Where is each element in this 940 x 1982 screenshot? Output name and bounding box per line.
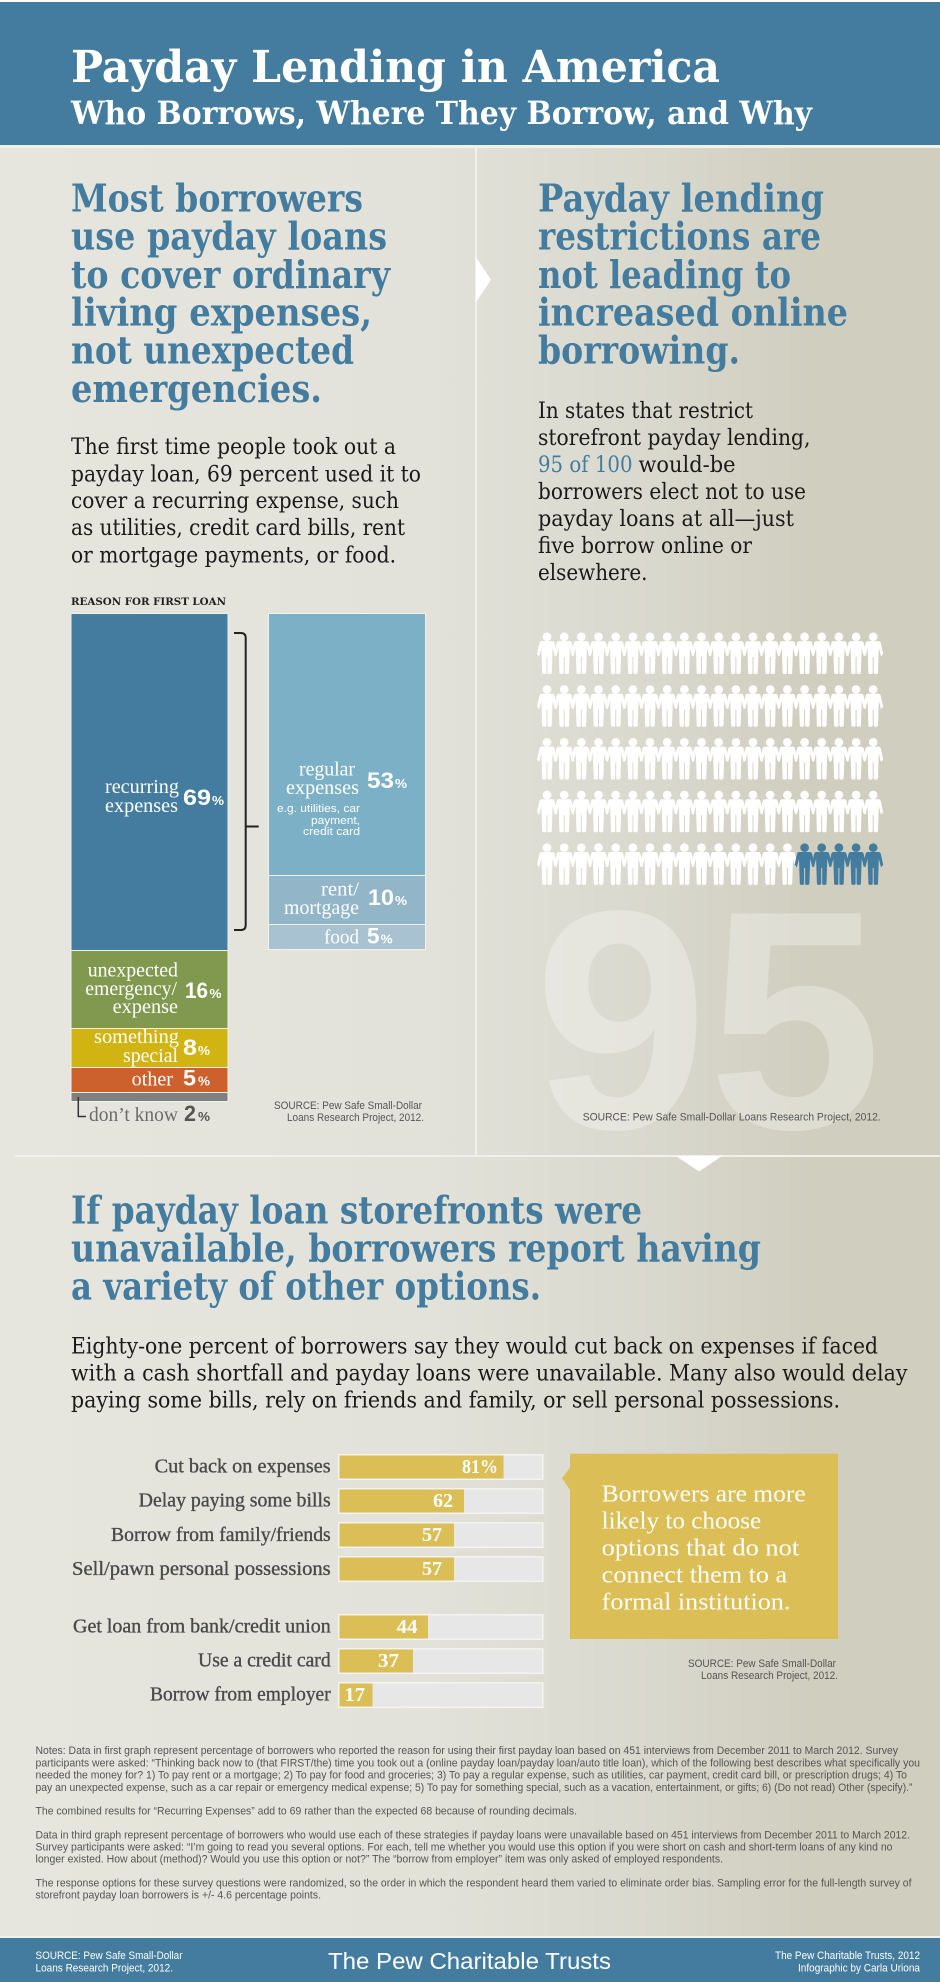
heading: payday lending restrictions: increased online	[538, 290, 848, 334]
segment: rent/mortgage 10%: %	[395, 893, 407, 908]
body text: eighty-one percent	[71, 1334, 908, 1414]
subtitle: Who Borrows, Where They Borrow, and Why	[70, 94, 813, 132]
notes: Notes: Data in first graph represent percentage of borrowers who reported the reason for using their first payday loan based on 451 interviews from December 2011 to March 2012. Survey	[36, 1745, 899, 1757]
body text: states that restrict: would-be	[638, 453, 736, 478]
callout: formal institution: likely to choose	[602, 1508, 761, 1534]
bar: delay paying some bills 62: 62	[433, 1490, 453, 1512]
footer credit: The Pew Charitable Trusts, 2012	[775, 1950, 920, 1962]
bar: cut back on expenses 81%	[155, 1455, 543, 1479]
body text: first time: The first time people took out a	[71, 435, 396, 460]
bar: get loan from bank/credit union 44: 44	[396, 1616, 418, 1638]
segment: regular expenses 53%: %	[395, 776, 407, 791]
notes: The response options for these survey questions were randomized, so the order in which the respondent heard them varied to eliminate order bias. Sampling error for the full-length survey of	[36, 1878, 912, 1890]
bar: sell/pawn personal possessions 57: Sell/pawn personal possessions	[72, 1559, 331, 1580]
notes: storefront payday loan borrowers is +/- 4.6 percentage points.	[36, 1890, 321, 1902]
segment: unexpected emergency 16%	[71, 950, 228, 1028]
bar: borrow from employer 17	[150, 1683, 543, 1707]
bar: get loan from bank/credit union 44: Get loan from bank/credit union	[73, 1617, 331, 1638]
title: Payday Lending in America	[71, 42, 720, 93]
body text: states that restrict: payday loans at all—just	[538, 507, 794, 532]
body text: first time: or mortgage payments, or food.	[71, 544, 396, 568]
callout: formal institution: formal institution.	[602, 1590, 790, 1616]
segment: rent/mortgage 10%: mortgage	[284, 897, 359, 919]
heading: storefronts unavailable: If payday loan storefronts were	[71, 1187, 642, 1232]
segment: unexpected emergency 16%: %	[210, 986, 222, 1001]
heading: payday lending restrictions: Payday lending	[538, 176, 824, 220]
heading: most borrowers: to cover ordinary	[71, 252, 391, 297]
footer	[0, 1936, 940, 1982]
heading: payday lending restrictions: borrowing.	[538, 328, 740, 372]
bar: get loan from bank/credit union 44	[73, 1615, 543, 1639]
segment: regular expenses 53%: expenses	[286, 777, 359, 799]
bar: borrow from employer 17: 17	[344, 1684, 365, 1706]
source note: Loans Research Project, 2012.	[701, 1670, 838, 1682]
footer source	[36, 1950, 183, 1974]
segment: other 5%: 5	[183, 1066, 196, 1091]
body text: states that restrict: elsewhere.	[538, 561, 648, 586]
source note: SOURCE: Pew Safe Small-Dollar	[274, 1100, 422, 1112]
segment: recurring expenses 69%: recurring	[105, 776, 179, 798]
segment: other 5%: %	[198, 1074, 210, 1089]
segment: don't know 2%: 2	[184, 1101, 196, 1126]
heading: payday lending restrictions: restrictions are	[538, 214, 821, 258]
segment: regular expenses 53%: regular	[299, 759, 355, 781]
callout: formal institution: connect them to a	[602, 1562, 788, 1588]
segment: rent/mortgage 10%: 10	[368, 885, 394, 910]
heading: payday lending restrictions: not leading to	[538, 252, 791, 297]
body text: states that restrict: storefront payday lending,	[538, 426, 810, 451]
heading: storefronts unavailable: unavailable, borrowers report having	[71, 1226, 761, 1271]
bar: use a credit card 37: 37	[378, 1650, 399, 1672]
body text: states that restrict	[538, 399, 810, 586]
segment: regular expenses 53%: 53	[367, 768, 394, 793]
segment: regular expenses 53%: e.g. utilities, car	[277, 803, 360, 815]
segment: something special 8%: 8	[183, 1035, 197, 1060]
body text: eighty-one percent: with a cash shortfall and payday loans were unavailable. Many also would delay	[71, 1362, 908, 1387]
body text: states that restrict: In states that restrict	[538, 399, 753, 424]
segment: something special 8%: something	[94, 1026, 179, 1048]
panel: online borrowing	[534, 176, 883, 1195]
callout: formal institution: Borrowers are more	[602, 1482, 806, 1508]
bar: borrow from family/friends 57: 57	[422, 1524, 442, 1546]
bar: delay paying some bills 62	[139, 1489, 543, 1513]
segment: regular expenses 53%: credit card	[303, 826, 360, 838]
segment: food 5%	[268, 924, 426, 950]
heading: most borrowers: not unexpected	[71, 328, 354, 372]
notes: longer existed. How about (method)? Would you use this option or not?” The “borrow from employer” item was only asked of employed respondents.	[36, 1854, 723, 1866]
segment: regular expenses 53%	[268, 614, 426, 876]
stacked bar: recurring breakdown	[268, 614, 426, 950]
segment: don't know 2%: %	[198, 1109, 210, 1124]
segment: other 5%: other	[132, 1069, 173, 1091]
segment: food 5%: 5	[367, 924, 380, 949]
body text: first time: as utilities, credit card bills, rent	[71, 516, 405, 541]
heading: storefronts unavailable: a variety of other options.	[71, 1263, 541, 1308]
bar: cut back on expenses 81%: 81%	[462, 1456, 498, 1478]
segment: something special 8%	[71, 1026, 228, 1068]
body text: states that restrict: 95 of 100	[538, 453, 632, 478]
footer credit	[775, 1950, 921, 1974]
notes: pay an unexpected expense, such as a car repair or emergency medical expense; 5) To pay for something special, such as a vacation, entertainment, or gifts; 6) (Do not read) Other (specify).”	[36, 1782, 913, 1794]
heading: most borrowers: living expenses,	[71, 290, 372, 334]
notes	[36, 1745, 920, 1902]
bar: sell/pawn personal possessions 57	[72, 1557, 543, 1581]
bar: delay paying some bills 62: Delay paying some bills	[139, 1491, 331, 1512]
source note	[274, 1100, 424, 1124]
segment: rent/mortgage 10%	[268, 876, 426, 924]
source note: Loans Research Project, 2012.	[287, 1112, 424, 1124]
bar: borrow from employer 17: Borrow from employer	[150, 1685, 331, 1706]
source note: SOURCE: Pew Safe Small-Dollar	[688, 1658, 836, 1670]
segment: regular expenses 53%: payment,	[311, 815, 360, 827]
bar: use a credit card 37	[198, 1649, 543, 1673]
bar: borrow from family/friends 57: Borrow from family/friends	[111, 1525, 331, 1546]
segment: unexpected emergency 16%: 16	[185, 978, 208, 1003]
segment: don't know 2%	[71, 1092, 228, 1126]
body text: eighty-one percent: Eighty-one percent of borrowers say they would cut back on expenses if faced	[71, 1334, 878, 1359]
source note: SOURCE: Pew Safe Small-Dollar Loans Research Project, 2012.	[583, 1112, 881, 1124]
footer source: Loans Research Project, 2012.	[36, 1962, 173, 1974]
segment: don't know 2%: don’t know	[89, 1104, 179, 1126]
bar: borrow from family/friends 57	[111, 1523, 543, 1547]
body text: eighty-one percent: paying some bills, rely on friends and family, or sell personal possessions.	[71, 1389, 840, 1414]
segment: something special 8%: %	[198, 1043, 210, 1058]
heading: most borrowers: Most borrowers	[71, 176, 363, 220]
pictogram: 95 of 100 people	[537, 632, 883, 885]
header banner	[0, 0, 940, 148]
stacked bar: reasons	[71, 614, 228, 1126]
bar: sell/pawn personal possessions 57: 57	[422, 1558, 442, 1580]
segment: recurring expenses 69%	[71, 614, 228, 950]
segment: other 5%	[71, 1066, 228, 1092]
big number 95: 95	[534, 847, 882, 1195]
notes: participants were asked: “Thinking back now to (that FIRST/the) time you took out a (online payday loan/payday loan/auto title loan), which of the following best describes what specifically you	[36, 1758, 920, 1770]
bar: cut back on expenses 81%: Cut back on expenses	[155, 1457, 331, 1478]
segment: unexpected emergency 16%: emergency/	[85, 978, 177, 1000]
segment: recurring expenses 69%: %	[212, 793, 224, 808]
heading: payday lending restrictions	[538, 176, 848, 372]
body text: first time: cover a recurring expense, such	[71, 489, 399, 514]
notes: Survey participants were asked: “I’m going to read you several options. For each, tell me whether you would use this option if you were short on cash and short-term loans of any kind no	[36, 1842, 892, 1854]
segment: food 5%: %	[381, 932, 393, 947]
heading: most borrowers: emergencies.	[71, 366, 322, 411]
notes: The combined results for “Recurring Expenses” add to 69 rather than the expected 68 because of rounding decimals.	[36, 1806, 577, 1818]
body text: states that restrict: five borrow online or	[538, 534, 752, 559]
segment: unexpected emergency 16%: expense	[113, 996, 178, 1018]
notes: needed the money for? 1) To pay rent or a mortgage; 2) To pay for food and groceries; 3) To pay a regular expense, such as utilities, car payment, credit card bill, or prescription drugs; 4) To	[36, 1770, 907, 1782]
callout: formal institution	[562, 1454, 838, 1639]
segment: rent/mortgage 10%: rent/	[321, 878, 359, 900]
callout: formal institution: options that do not	[602, 1536, 800, 1562]
source note	[688, 1658, 838, 1682]
footer organisation: The Pew Charitable Trusts	[328, 1948, 611, 1974]
footer credit: Infographic by Carla Uriona	[798, 1962, 921, 1974]
bar: use a credit card 37: Use a credit card	[198, 1651, 331, 1672]
heading: most borrowers	[71, 176, 391, 411]
segment: recurring expenses 69%: 69	[183, 785, 211, 810]
bracket	[234, 633, 259, 930]
bar chart: alternatives	[72, 1455, 543, 1707]
heading: storefronts unavailable	[71, 1187, 761, 1308]
footer source: SOURCE: Pew Safe Small-Dollar	[36, 1950, 183, 1962]
panel: other options	[71, 1187, 908, 1707]
segment: something special 8%: special	[123, 1045, 178, 1067]
segment: recurring expenses 69%: expenses	[105, 795, 178, 817]
segment: unexpected emergency 16%: unexpected	[88, 960, 178, 982]
heading: most borrowers: use payday loans	[71, 214, 387, 258]
panel: ordinary living expenses	[71, 176, 426, 1126]
body text: first time	[71, 435, 421, 568]
panel dividers and arrows	[15, 148, 940, 1172]
body text: first time: payday loan, 69 percent used it to	[71, 462, 421, 488]
chart title: REASON FOR FIRST LOAN	[71, 596, 226, 608]
body text: states that restrict: borrowers elect not to use	[538, 480, 806, 505]
segment: food 5%: food	[324, 927, 359, 949]
notes: Data in third graph represent percentage of borrowers who would use each of these strategies if payday loans were unavailable based on 451 interviews from December 2011 to March 2012.	[36, 1830, 910, 1842]
